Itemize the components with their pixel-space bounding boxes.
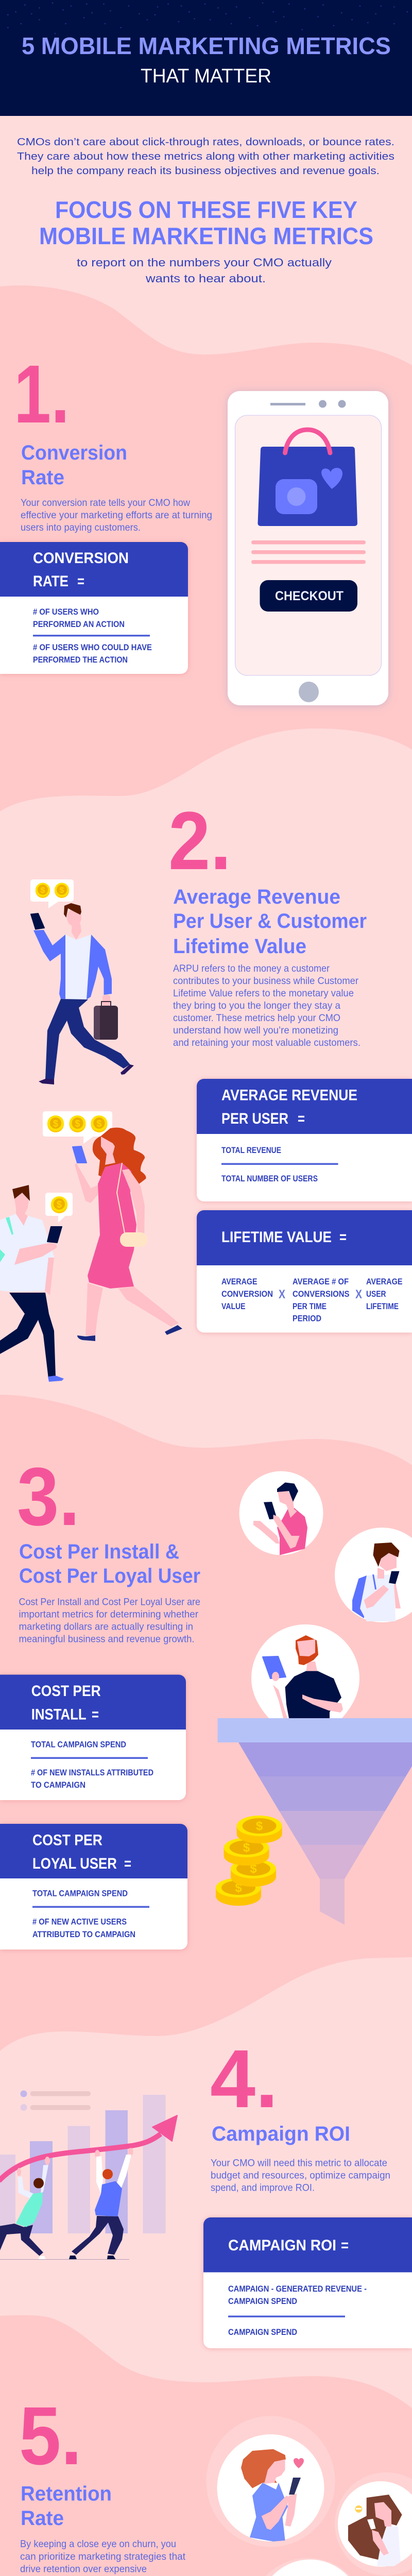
text: retention rate: drive retention over expensive <box>20 2564 147 2575</box>
number 2: 2. <box>168 794 231 887</box>
illustration: woman in circle <box>239 1471 323 1555</box>
speech bubble: one coin <box>45 1193 73 1223</box>
illustration: coin stack: $ <box>235 1881 242 1895</box>
text: campaign ROI: Your CMO will need this metric to allocate <box>211 2158 387 2169</box>
formula card: lifetime value: CONVERSIONS <box>293 1290 349 1299</box>
button: checkout: CHECKOUT <box>275 589 344 603</box>
heading: ARPU and LTV <box>173 886 367 958</box>
heading: conversion rate: Rate <box>21 466 64 489</box>
speech bubble: one coin: $ <box>57 1199 62 1210</box>
title: THAT MATTER <box>141 65 271 87</box>
intro text: They care about how these metrics along with other marketing activities <box>17 151 394 162</box>
illustration: man with cap and tablet in circle <box>249 2558 367 2576</box>
formula card: cost per install: = <box>92 1706 99 1723</box>
text: CPI and CPLU: meaningful business and revenue growth. <box>19 1634 195 1645</box>
text: retention rate: By keeping a close eye on churn, you <box>20 2539 176 2550</box>
formula card: lifetime value: AVERAGE # OF <box>293 1277 349 1286</box>
panel: header <box>0 0 412 116</box>
heading: CPI and CPLU: Cost Per Install & <box>19 1540 179 1563</box>
arrow <box>0 2115 177 2181</box>
formula card: lifetime value: AVERAGE <box>366 1277 403 1286</box>
formula card: lifetime value: AVERAGE <box>221 1277 258 1286</box>
illustration: woman with long hair in circle <box>335 2472 412 2575</box>
heading: retention rate <box>21 2482 112 2530</box>
illustration: man with backpack in circle <box>335 1528 412 1622</box>
text: CPI and CPLU: marketing dollars are actually resulting in <box>19 1622 193 1632</box>
illustration: man with bag and coins <box>30 879 134 1084</box>
heading: campaign ROI: Campaign ROI <box>212 2123 350 2145</box>
formula card: conversion rate: PERFORMED AN ACTION <box>33 620 125 629</box>
formula card: average revenue per user: TOTAL REVENUE <box>221 1146 281 1155</box>
heading: ARPU and LTV: Average Revenue <box>173 886 340 908</box>
text: campaign ROI: budget and resources, optimize campaign <box>211 2170 390 2181</box>
illustration: phone with checkout <box>228 391 388 705</box>
button: checkout <box>260 580 357 612</box>
subheading <box>77 256 332 285</box>
illustration: coin stack: $ <box>250 1862 257 1876</box>
formula card: conversion rate: = <box>77 573 84 590</box>
formula card: cost per install: TO CAMPAIGN <box>31 1781 85 1790</box>
formula card: cost per loyal user <box>0 1824 187 1950</box>
speech bubble: three coins: $ <box>96 1118 102 1129</box>
formula card: lifetime value <box>197 1210 412 1332</box>
heading: focus on five metrics: FOCUS ON THESE FIVE KEY <box>55 196 357 223</box>
formula card: lifetime value: USER <box>366 1290 386 1299</box>
formula card: campaign ROI <box>203 2217 412 2348</box>
speech bubble: two coins <box>30 879 74 908</box>
text: conversion rate: users into paying customers. <box>21 522 141 533</box>
formula card: lifetime value: PER TIME <box>293 1302 327 1311</box>
heading: conversion rate <box>21 442 127 489</box>
illustration: coin stack: $ <box>243 1841 250 1855</box>
number 3: 3. <box>17 1450 80 1543</box>
illustration: bearded man in circle <box>251 1624 359 1718</box>
formula card: lifetime value: CONVERSION <box>221 1290 273 1299</box>
illustration: woman with heart in circle <box>206 2416 335 2547</box>
formula card: lifetime value: = <box>339 1229 347 1246</box>
text: retention rate <box>20 2539 186 2576</box>
heading: CPI and CPLU: Cost Per Loyal User <box>19 1565 200 1587</box>
heading: CPI and CPLU <box>19 1540 200 1587</box>
formula card: cost per loyal user: ATTRIBUTED TO CAMPAIGN <box>32 1930 135 1939</box>
number 4: 4. <box>210 2032 278 2125</box>
formula card: conversion rate: # OF USERS WHO COULD HAVE <box>33 643 152 652</box>
formula card: campaign ROI: CAMPAIGN - GENERATED REVENUE - <box>228 2284 367 2294</box>
illustration: coin stack: $ <box>256 1819 263 1833</box>
formula card: lifetime value: VALUE <box>221 1302 245 1311</box>
illustration: woman with phone and coins <box>43 1111 182 1341</box>
formula card: average revenue per user: TOTAL NUMBER OF USERS <box>221 1174 318 1183</box>
title: 5 MOBILE MARKETING METRICS <box>22 32 391 59</box>
formula card: campaign ROI: CAMPAIGN SPEND <box>228 2328 297 2337</box>
intro text: help the company reach its business objectives and revenue goals. <box>31 165 380 177</box>
speech bubble: three coins: $ <box>75 1118 80 1129</box>
title <box>22 32 391 87</box>
subheading: to report on the numbers your CMO actually <box>77 256 332 269</box>
text: retention rate: can prioritize marketing strategies that <box>20 2551 186 2563</box>
text: ARPU and LTV: contributes to your business while Customer <box>173 976 359 987</box>
intro text: CMOs don’t care about click-through rates, downloads, or bounce rates. <box>17 137 394 148</box>
formula card: conversion rate: # OF USERS WHO <box>33 607 99 617</box>
text: conversion rate: Your conversion rate tells your CMO how <box>21 498 190 509</box>
text: campaign ROI <box>211 2158 390 2194</box>
text: conversion rate <box>21 498 212 533</box>
formula card: cost per loyal user: # OF NEW ACTIVE USERS <box>32 1918 127 1927</box>
formula card: campaign ROI: CAMPAIGN SPEND <box>228 2297 297 2306</box>
speech bubble: two coins: $ <box>41 886 45 895</box>
illustration: bar chart and two people lifting arrow <box>0 2091 177 2260</box>
formula card: lifetime value: PERIOD <box>293 1314 321 1323</box>
speech bubble: two coins: $ <box>60 886 64 895</box>
formula card: average revenue per user: AVERAGE REVENUE <box>221 1087 357 1104</box>
formula card: lifetime value: X <box>279 1287 285 1301</box>
formula card: cost per install: # OF NEW INSTALLS ATTRIBUTED <box>31 1768 153 1777</box>
formula card: lifetime value: X <box>355 1287 362 1301</box>
formula card: cost per install: COST PER <box>31 1683 101 1700</box>
icon: shopping bag <box>258 430 357 526</box>
formula card: lifetime value: LIFETIME <box>366 1302 399 1311</box>
heading: focus on five metrics: MOBILE MARKETING METRICS <box>39 223 373 249</box>
text: ARPU and LTV: and retaining your most valuable customers. <box>173 1038 360 1048</box>
text: ARPU and LTV: customer. These metrics help your CMO <box>173 1013 340 1024</box>
formula card: conversion rate: PERFORMED THE ACTION <box>33 655 128 665</box>
heading: conversion rate: Conversion <box>21 442 127 464</box>
formula card: cost per loyal user: LOYAL USER <box>32 1855 117 1872</box>
formula card: cost per install: INSTALL <box>31 1706 87 1723</box>
formula card: cost per loyal user: TOTAL CAMPAIGN SPEND <box>32 1889 128 1898</box>
text: ARPU and LTV: Lifetime Value refers to the monetary value <box>173 988 354 999</box>
text: ARPU and LTV: they bring to you the longer they stay a <box>173 1001 340 1011</box>
formula card: lifetime value: LIFETIME VALUE <box>221 1229 332 1246</box>
illustration: funnel <box>217 1718 412 1925</box>
intro text <box>17 137 394 177</box>
formula card: conversion rate: CONVERSION <box>33 550 129 567</box>
formula card: average revenue per user: PER USER <box>221 1110 288 1127</box>
formula card: average revenue per user <box>197 1079 412 1201</box>
text: CPI and CPLU: important metrics for determining whether <box>19 1609 199 1620</box>
formula card: conversion rate <box>0 542 188 674</box>
heading: retention rate: Retention <box>21 2482 112 2505</box>
formula card: conversion rate: RATE <box>33 573 68 590</box>
number 5: 5. <box>19 2389 82 2482</box>
formula card: cost per loyal user: COST PER <box>32 1832 102 1849</box>
heading: focus on five metrics <box>39 196 373 249</box>
illustration: coin stack <box>216 1816 282 1906</box>
number 1: 1. <box>14 348 70 440</box>
illustration: man with backpack and coin <box>0 1185 73 1382</box>
text: ARPU and LTV: understand how well you’re monetizing <box>173 1025 338 1036</box>
text: conversion rate: effective your marketing efforts are at turning <box>21 510 212 521</box>
text: CPI and CPLU <box>19 1597 200 1645</box>
text: CPI and CPLU: Cost Per Install and Cost Per Loyal User are <box>19 1597 200 1607</box>
formula card: campaign ROI: = <box>341 2237 349 2254</box>
formula card: cost per install <box>0 1674 186 1800</box>
formula card: campaign ROI: CAMPAIGN ROI <box>228 2237 336 2254</box>
formula card: cost per install: TOTAL CAMPAIGN SPEND <box>31 1740 126 1750</box>
subheading: wants to hear about. <box>145 272 266 285</box>
heading: retention rate: Rate <box>21 2507 64 2530</box>
speech bubble: three coins <box>43 1111 112 1144</box>
heading: ARPU and LTV: Lifetime Value <box>173 935 306 958</box>
formula card: cost per loyal user: = <box>124 1855 131 1872</box>
speech bubble: three coins: $ <box>53 1118 58 1129</box>
heading: ARPU and LTV: Per User & Customer <box>173 910 367 933</box>
text: ARPU and LTV <box>173 963 360 1048</box>
text: ARPU and LTV: ARPU refers to the money a customer <box>173 963 330 974</box>
formula card: average revenue per user: = <box>298 1110 305 1127</box>
text: campaign ROI: spend, and improve ROI. <box>211 2182 315 2194</box>
